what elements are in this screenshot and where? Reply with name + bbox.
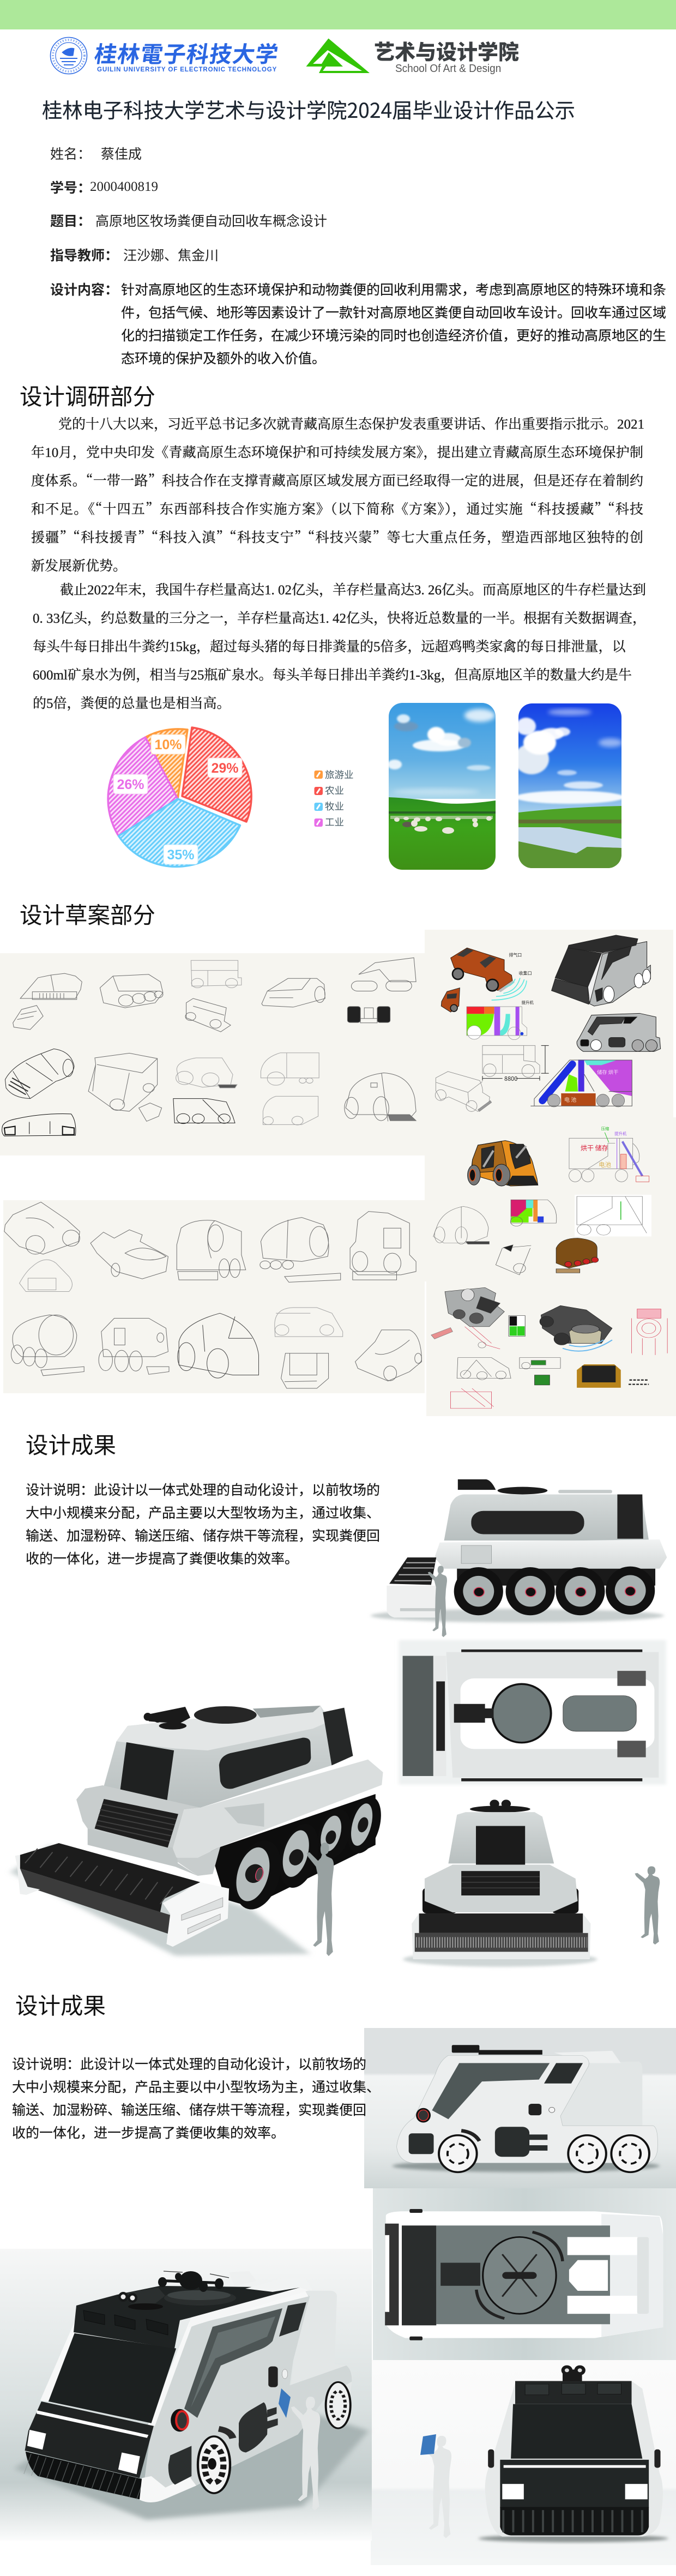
- slats: [500, 2507, 649, 2536]
- rear dark undercarriage: [457, 1565, 655, 1586]
- upper-sheet pencil sketches: [2, 958, 416, 1136]
- text: research paragraph two: 每头牛每日排出牛粪约15kg，超过每头猪的每日排粪量的5倍多，远超鸡鸭类家禽的每日排泄量，以: [33, 636, 626, 655]
- white strip: [37, 2410, 148, 2438]
- tail block: [637, 2237, 649, 2314]
- side body: [142, 2291, 352, 2502]
- vehicle one: side view: [371, 1479, 667, 1622]
- rear pillar: [323, 1708, 353, 1765]
- panel: vehicle two side background: [364, 2028, 676, 2188]
- heading: design result two: 设计成果: [15, 1988, 106, 2020]
- panel: vehicle two top background: [373, 2188, 676, 2360]
- white front trim: [148, 2291, 309, 2426]
- panel: colour sketches bottom right: [426, 1281, 676, 1416]
- black tracks: [422, 1888, 578, 1913]
- sketch: small frame: [496, 1245, 531, 1275]
- panel: vehicle two hero background: [0, 2249, 372, 2541]
- drone landing pad: [164, 2290, 236, 2306]
- turret: [562, 2366, 586, 2382]
- text: design note two: 设计说明：此设计以一体式处理的自动化设计，以前牧场的: [12, 2054, 366, 2073]
- logo: school name: School Of Art & Design: [395, 63, 501, 75]
- roof hatch: [563, 1696, 636, 1731]
- sketch: pale pod: [20, 1260, 72, 1292]
- logo: university name: 桂林電子科技大学: [93, 36, 281, 69]
- wheels: [454, 1567, 655, 1615]
- colour sketches: lower right group: [431, 1195, 667, 1409]
- sketch: cone pod: [4, 1202, 80, 1254]
- sketch: dimensioned side view: [435, 1045, 549, 1111]
- fascia: [25, 2402, 154, 2478]
- label 10%: [151, 735, 185, 754]
- icon: school of art triangle logo: [306, 38, 370, 73]
- text: research paragraph one: 年10月，党中央印发《青藏高原生态环境保护和可持续发展方案》，提出建立青藏高原生态环境保护制: [31, 442, 643, 461]
- red side lights: [409, 2209, 422, 2340]
- roof turret and dome: [458, 1479, 612, 1494]
- roof hatch strip: [253, 1706, 321, 1718]
- panel: upper sketch sheet: [0, 953, 425, 1155]
- arc: [219, 2429, 233, 2438]
- vehicle two: side view: [393, 2045, 660, 2172]
- sketch: brown vehicle: [556, 1238, 599, 1273]
- dome: [492, 1684, 551, 1743]
- sketch: red annotated diagram: 压缩: [601, 1126, 609, 1132]
- white left pillar: [40, 2318, 76, 2402]
- sketch: red frame: [450, 1388, 493, 1409]
- colour sketches: top right group: [435, 935, 661, 1186]
- sketch: brush roller and note: [431, 1327, 500, 1349]
- figure beside front view: [635, 1866, 660, 1945]
- field: advisors: 指导教师：: [50, 245, 118, 264]
- field: student number: 2000400819: [90, 179, 158, 194]
- sketch: small orange truck: [441, 988, 460, 1012]
- field: student number: 学号：: [50, 177, 91, 197]
- text: design note one: 设计说明：此设计以一体式处理的自动化设计，以前牧场的: [26, 1479, 380, 1499]
- title: 桂林电子科技大学艺术与设计学院2024届毕业设计作品公示: [42, 94, 575, 124]
- vehicle two: front view: [479, 2366, 668, 2542]
- text: research paragraph one: 度体系。“一带一路”科技合作在支撑青藏高原区域发展方面已经取得一定的进展，但是还存在着制约: [31, 470, 643, 490]
- chart legend: 旅游业: [325, 768, 353, 781]
- windscreen: [49, 2333, 176, 2423]
- label 35%: 35%: [167, 847, 195, 863]
- roof white box: [245, 2277, 312, 2292]
- dome: [194, 1706, 257, 1724]
- binocular turret: [118, 2288, 165, 2310]
- grey deck: [436, 2225, 610, 2324]
- collector frame: [15, 1855, 40, 1895]
- side socket: [529, 2104, 555, 2115]
- text: design note one: 输送、加湿粉碎、输送压缩、储存烘干等流程，实现粪便回: [26, 1525, 380, 1545]
- pie chart: [108, 727, 251, 866]
- chart legend: [314, 768, 353, 829]
- text: research paragraph two: [33, 579, 646, 712]
- text: research paragraph one: 和不足。《“十四五”东西部科技合作实施方案》（以下简称《方案》），通过实施“科技援藏”“科技: [31, 498, 643, 518]
- deck: [446, 1652, 659, 1778]
- front window: [119, 1742, 174, 1804]
- sketch: compact: [176, 1058, 237, 1088]
- windscreen: [402, 2225, 436, 2325]
- bottom slats: [26, 2452, 142, 2500]
- turret: [440, 2263, 480, 2286]
- text: design note two: 收的一体化，进一步提高了粪便收集的效率。: [12, 2122, 285, 2142]
- upper white trim: [188, 2288, 309, 2327]
- text: research paragraph two: 0. 33亿头，约总数量的三分之一，羊存栏量高达1. 42亿头，快将近总数量的一半。根据有关数据调查，: [33, 607, 646, 627]
- grille: [461, 1871, 540, 1895]
- rear roof box: [229, 2271, 256, 2286]
- knob: [171, 2409, 189, 2431]
- knob: [416, 2108, 431, 2123]
- sketch: side profile: [275, 1308, 343, 1337]
- field: design content: 针对高原地区的生态环境保护和动物粪便的回收利用需求，考虑到高原地区的特殊环境和条: [121, 279, 666, 299]
- label 29%: [208, 758, 242, 778]
- sketch: grey side vehicle: [577, 1013, 661, 1051]
- front strip: [385, 2224, 399, 2325]
- label 29%: 29%: [211, 761, 239, 776]
- sketch: wheeled chain: [173, 1099, 235, 1124]
- sketch: orange truck with sensor arcs: 排气口: [509, 952, 522, 958]
- field: design content: 件，包括气候、地形等因素设计了一款针对高原地区粪便自动回收车设计。回收车通过区域: [121, 302, 666, 322]
- vent: [544, 2063, 583, 2084]
- sketch: round tank: [260, 1218, 341, 1282]
- door and prongs: [239, 2403, 278, 2453]
- text: design note one: 收的一体化，进一步提高了粪便收集的效率。: [26, 1548, 298, 1568]
- undercarriage: [210, 1794, 376, 1907]
- sketch: van 2: [263, 1096, 318, 1125]
- rear body: [291, 2291, 352, 2400]
- front skirt: [76, 1785, 220, 1876]
- top green band: [0, 0, 676, 29]
- roof: [117, 1706, 325, 1750]
- vehicle one: front view: [403, 1799, 597, 1967]
- roof box: [554, 2051, 621, 2063]
- sketch: white annotated diagram: [575, 1195, 651, 1237]
- text: research paragraph one: 党的十八大以来，习近平总书记多次就青藏高原生态保护发表重要讲话、作出重要指示批示。2021: [58, 413, 644, 433]
- roof camera recesses: [83, 2310, 168, 2335]
- sketch: box wedge: [88, 1053, 162, 1121]
- turret: [452, 2045, 542, 2055]
- sketch: red circle detail: [632, 1309, 667, 1355]
- sketch: orange capsule: [468, 1141, 538, 1186]
- icon: university seal: [50, 37, 87, 74]
- sketch: red annotated diagram: [569, 1126, 649, 1182]
- text: research paragraph one: [31, 413, 644, 575]
- lower-sheet pencil sketches: [4, 1202, 421, 1388]
- sketch: rear view: [281, 1353, 329, 1388]
- turret: [454, 1704, 493, 1723]
- text: design note two: 大中小规模来分配，产品主要以中小型牧场为主，通过收集、: [12, 2077, 380, 2096]
- shell: [485, 2381, 663, 2537]
- text: design note two: [12, 2054, 380, 2142]
- chart legend: 牧业: [325, 799, 344, 813]
- vehicle two: top view: [385, 2209, 663, 2340]
- logo: school name: 艺术与设计学院: [374, 35, 519, 65]
- rear wheel: [326, 2382, 351, 2428]
- sketch: white capsule: [433, 1206, 490, 1244]
- panel: colour sketches top right: [425, 930, 673, 1118]
- sketch: track walker: [352, 958, 416, 991]
- sketch: rounded pod: [5, 1049, 74, 1099]
- sketch: triangular section diagram: 储存 烘干: [597, 1068, 618, 1075]
- side knobs: [488, 2449, 661, 2468]
- turret: [470, 1799, 530, 1813]
- slice: husbandry 35%: [119, 799, 240, 866]
- sketch: dimensioned side view: 8800: [504, 1074, 517, 1083]
- sketch: mini side frames: [457, 1358, 560, 1385]
- roof panel: [74, 2286, 300, 2349]
- figure beside hero render: [307, 1843, 334, 1956]
- panel: vehicle two front background: [371, 2360, 676, 2565]
- field: name: 姓名：: [50, 143, 91, 163]
- sketch: orange truck with sensor arcs: [451, 948, 532, 1000]
- field: design content: [50, 279, 666, 368]
- sketch: collector vehicle side: [13, 973, 82, 1030]
- sketch: tracked vehicle: [100, 974, 163, 1008]
- cabin: [448, 1812, 554, 1863]
- sketch: green and black squares: [509, 1316, 525, 1337]
- cabin: [444, 1494, 649, 1540]
- drone: [158, 2271, 229, 2292]
- front wheel: [198, 2436, 230, 2493]
- collector: [412, 1913, 590, 1959]
- vehicle one: top view: [399, 1640, 666, 1785]
- lower body: [425, 1864, 578, 1912]
- sketch: box isometric: [185, 998, 231, 1032]
- text: research paragraph one: 援疆”“科技援青”“科技入滇”“科技支宁”“科技兴蒙”等七大重点任务，塑造西部地区独特的创: [31, 527, 643, 546]
- text: research paragraph two: 截止2022年末，我国牛存栏量高达1. 02亿头，羊存栏量高达3. 26亿头。而高原地区的牛存栏量达到: [60, 579, 646, 599]
- screen: [511, 2404, 642, 2459]
- main body: [397, 2055, 657, 2163]
- lights: [27, 2430, 140, 2474]
- skirt: [434, 1539, 667, 1569]
- sketch: triangular section diagram: 电 池: [564, 1096, 576, 1104]
- chart legend: 工业: [325, 815, 344, 829]
- drone pad: [476, 2232, 563, 2319]
- text: design note one: 大中小规模来分配，产品主要以大型牧场为主，通过收集、: [26, 1502, 380, 1522]
- sketch: dark collector with blue arcs: [540, 1305, 612, 1351]
- arc: [461, 2130, 479, 2141]
- text: design note one: [26, 1479, 380, 1568]
- slice: industry 26%: [108, 737, 178, 836]
- rear pillar: [617, 1494, 643, 1539]
- field: topic: 高原地区牧场粪便自动回收车概念设计: [95, 210, 327, 230]
- sketch: colour block section: [467, 1000, 534, 1040]
- side window: [471, 1511, 584, 1534]
- heading: design research: 设计调研部分: [20, 378, 155, 411]
- photo: sheep on grassland: [388, 703, 496, 872]
- collector end box: [162, 1882, 229, 1947]
- side skirt: [173, 1760, 383, 1858]
- text: research paragraph two: 600ml矿泉水为例，相当与25瓶矿泉水。每头羊每日排出羊粪约1-3kg，但高原地区羊的数量大约是牛: [33, 664, 632, 684]
- vehicle two: roof, drone and upper glazing: [74, 2271, 312, 2418]
- sketch: low profile: [2, 1114, 76, 1136]
- sketch: van: [261, 1053, 319, 1085]
- sketch: barrel: [11, 1315, 84, 1376]
- shell: [385, 2211, 663, 2338]
- cabin: [102, 1706, 353, 1808]
- wheels: [439, 2135, 649, 2172]
- door: [495, 2127, 547, 2157]
- sketch: red annotated diagram: 提升机: [614, 1131, 627, 1137]
- collector: [403, 1656, 434, 1776]
- sketch: upright tank: [350, 1212, 416, 1280]
- collector teeth: [20, 1869, 173, 1935]
- sketch: black wheel front: [347, 1007, 390, 1023]
- collector belt: [20, 1843, 200, 1912]
- lights: [502, 2484, 648, 2499]
- sketch: dark rendered vehicle: [552, 935, 650, 1006]
- top band: [515, 2381, 632, 2404]
- sketch: wedge pod: [355, 1330, 421, 1381]
- field: student number: [50, 177, 158, 197]
- field: topic: 题目：: [50, 210, 91, 230]
- label 10%: 10%: [154, 737, 182, 753]
- sketch: barrel with window: [99, 1318, 169, 1374]
- sketch: grey collector render: [445, 1287, 504, 1327]
- outer white wrap: [140, 2476, 196, 2502]
- field: advisors: 汪沙娜、焦金川: [123, 245, 219, 264]
- side window: [219, 1738, 311, 1789]
- wheels: [228, 1795, 387, 1912]
- sketch: orange truck with sensor arcs: 收集口: [519, 970, 532, 976]
- sketch: colour block section: 提升机: [522, 1000, 534, 1006]
- sketch: long drum: [90, 1230, 168, 1279]
- label 26%: [113, 774, 148, 794]
- panel: colour sketches middle right: [425, 1117, 676, 1281]
- sketch: two-door pod: [178, 1313, 258, 1378]
- front vent: [409, 2133, 434, 2154]
- vehicle two: hero perspective render: [14, 2291, 369, 2520]
- sketch: gold black front: [577, 1364, 649, 1388]
- text: research paragraph one: 新发展新优势。: [31, 555, 126, 575]
- L window glazing: [184, 2308, 282, 2418]
- sketch: red annotated diagram: 电池: [599, 1160, 611, 1169]
- side boxes: [617, 1671, 646, 1758]
- binocular turret: [144, 1707, 190, 1730]
- field: advisors: [50, 245, 219, 264]
- grille: [95, 1799, 178, 1847]
- front side vent: [168, 2446, 191, 2484]
- figure with blue tablet, hero: [279, 2388, 320, 2511]
- sketch: box side view: [191, 960, 242, 988]
- sketch: mini colour block: [510, 1200, 557, 1226]
- figure beside side view: [428, 1566, 447, 1637]
- label 26%: 26%: [117, 777, 144, 792]
- field: design content: 化的扫描锁定工作任务，在减少环境污染的同时也创造经济价值，更好的推动高原地区的生: [121, 325, 666, 345]
- sketch: red annotated diagram: 烘干 储存: [581, 1143, 608, 1152]
- field: design content: 设计内容：: [50, 279, 118, 299]
- slice: tourism 10%: [145, 729, 188, 799]
- sketch: tanker: [177, 1220, 246, 1280]
- L window: [432, 2063, 550, 2119]
- vehicle one: hero perspective render: [10, 1706, 387, 1956]
- sketch: hatch: [262, 978, 325, 1007]
- field: name: [50, 143, 142, 163]
- front collector: [387, 1557, 437, 1617]
- sketch: capsule: [345, 1073, 416, 1121]
- rear body: [560, 2062, 642, 2126]
- slice: agriculture 29%: [182, 727, 251, 822]
- logo: university name: GUILIN UNIVERSITY OF ELECTRONIC TECHNOLOGY: [97, 67, 277, 73]
- text: research paragraph two: 的5倍，粪便的总量也是相当高。: [33, 693, 231, 712]
- field: design content: 态环境的保护及额外的收入价值。: [121, 348, 325, 368]
- tail panel: [601, 2214, 663, 2337]
- side socket: [268, 2367, 288, 2387]
- white strip: [504, 2465, 646, 2468]
- fascia: [500, 2460, 649, 2508]
- label 35%: [164, 845, 198, 864]
- chart legend: 农业: [325, 784, 344, 797]
- heading: design sketches: 设计草案部分: [20, 897, 155, 930]
- figure with blue tablet, front view: [420, 2434, 451, 2538]
- photo: lake under blue sky: [514, 703, 624, 872]
- heading: design result one: 设计成果: [26, 1427, 116, 1460]
- white bars: [568, 2237, 637, 2314]
- panel: lower sketch sheet: [3, 1200, 425, 1393]
- sketch: triangular section diagram: [530, 1060, 632, 1107]
- text: design note two: 输送、加湿粉碎、输送压缩、储存烘干等流程，实现粪便回: [12, 2099, 366, 2119]
- field: name: 蔡佳成: [101, 143, 142, 163]
- upper vent: [279, 2302, 306, 2337]
